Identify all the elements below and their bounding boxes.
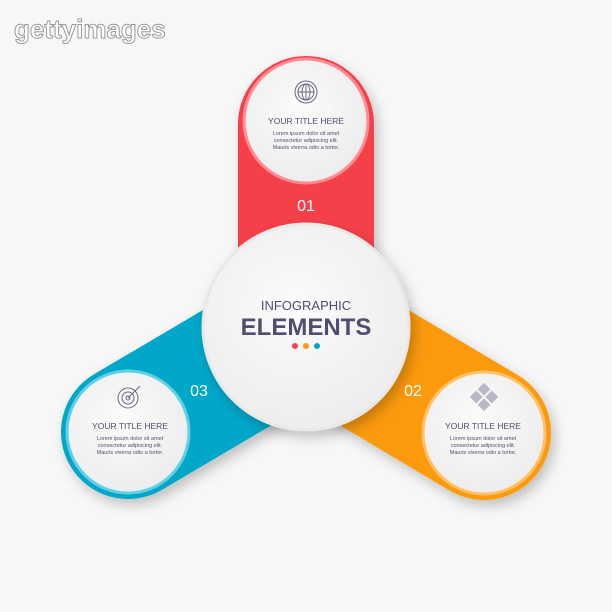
text blocks: YOUR TITLE HERE [268,116,344,126]
text blocks: Lorem ipsum dolor sit amet [450,436,517,442]
numbers: 02 [404,383,422,400]
arm: blue 03 [67,327,306,493]
text blocks: Mauris viverra odio a tortor. [97,450,164,456]
numbers: 01 [297,198,315,215]
icon: globe [295,81,317,103]
numbers: 03 [190,383,208,400]
color dots [292,343,320,349]
icon: target [118,386,140,408]
text blocks: Mauris viverra odio a tortor. [450,450,517,456]
text blocks: consectetur adipiscing elit. [451,443,516,449]
center title [241,298,371,341]
center title: ELEMENTS [241,314,371,341]
watermark: gettyimages [14,14,166,44]
numbers [190,198,422,400]
icon: puzzle [470,383,498,411]
text blocks: YOUR TITLE HERE [92,421,168,431]
center circle [203,224,409,430]
top circle [244,59,368,183]
text blocks: consectetur adipiscing elit. [274,138,339,144]
text blocks: consectetur adipiscing elit. [98,443,163,449]
center title: INFOGRAPHIC [261,298,351,313]
text blocks: YOUR TITLE HERE [445,421,521,431]
text blocks: Lorem ipsum dolor sit amet [273,131,340,137]
arm: orange 02 [306,327,545,494]
text blocks: Mauris viverra odio a tortor. [273,145,340,151]
text blocks: Lorem ipsum dolor sit amet [97,436,164,442]
text blocks [92,116,521,456]
arm: red 01 [244,59,368,327]
